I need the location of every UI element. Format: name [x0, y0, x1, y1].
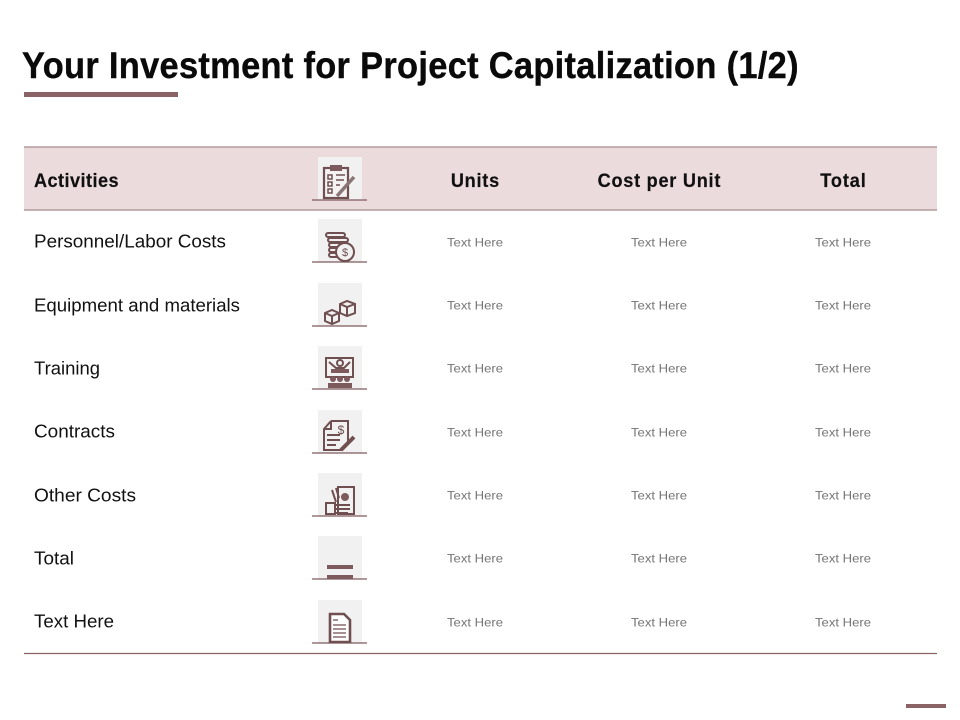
row: Equipment and materials: Text Here [815, 298, 871, 312]
row: Total: Text Here [631, 552, 687, 566]
icon: coins with dollar [312, 219, 367, 262]
row: Contracts [34, 422, 871, 442]
icon: contract with pen: $ [338, 423, 345, 437]
icon: total bars [312, 536, 367, 579]
row: Total: Text Here [815, 552, 871, 566]
row: Other Costs: Text Here [815, 488, 871, 502]
row: Total [34, 548, 871, 568]
row: Training: Text Here [631, 362, 687, 376]
table bottom rule [24, 652, 937, 654]
row: Contracts: Text Here [447, 426, 503, 440]
row: Text Here: Text Here [631, 616, 687, 630]
table header row: Units [451, 169, 499, 191]
row: Personnel/Labor Costs: Text Here [447, 236, 503, 250]
row: Text Here: Text Here [815, 616, 871, 630]
row: Equipment and materials: Equipment and materials [34, 296, 240, 316]
icon: boxes [312, 283, 367, 326]
row: Other Costs: Text Here [631, 488, 687, 502]
row: Other Costs: Text Here [447, 488, 503, 502]
row: Personnel/Labor Costs: Text Here [631, 236, 687, 250]
row: Equipment and materials: Text Here [631, 298, 687, 312]
row: Training [34, 358, 871, 378]
icon: hand holding money [312, 473, 367, 516]
row: Personnel/Labor Costs: Personnel/Labor Costs [34, 232, 226, 252]
row: Training: Training [34, 358, 100, 378]
row: Text Here: Text Here [34, 612, 114, 632]
row: Personnel/Labor Costs: Text Here [815, 236, 871, 250]
row: Text Here [34, 612, 871, 632]
row: Personnel/Labor Costs [34, 232, 871, 252]
row: Training: Text Here [815, 362, 871, 376]
title: Your Investment for Project Capitalization (1/2) [22, 45, 799, 86]
row: Other Costs [34, 486, 871, 506]
icon: training presentation [312, 346, 367, 389]
icon: contract with pen [312, 410, 367, 453]
row: Other Costs: Other Costs [34, 486, 136, 506]
page marker [906, 704, 946, 708]
row: Contracts: Text Here [631, 426, 687, 440]
row: Total: Total [34, 548, 74, 568]
table header row: Total [820, 169, 866, 191]
icon: coins with dollar: $ [342, 247, 348, 259]
row: Contracts: Contracts [34, 422, 115, 442]
table [24, 147, 937, 654]
icon: document [312, 600, 367, 643]
row: Equipment and materials [34, 296, 871, 316]
icon: clipboard checklist [312, 157, 367, 200]
row: Training: Text Here [447, 362, 503, 376]
row: Equipment and materials: Text Here [447, 298, 503, 312]
title underline [24, 92, 178, 97]
table header row: Cost per Unit [598, 169, 721, 191]
table header row [24, 147, 937, 210]
row: Total: Text Here [447, 552, 503, 566]
row: Text Here: Text Here [447, 616, 503, 630]
table header row: Activities [34, 169, 119, 191]
row: Contracts: Text Here [815, 426, 871, 440]
